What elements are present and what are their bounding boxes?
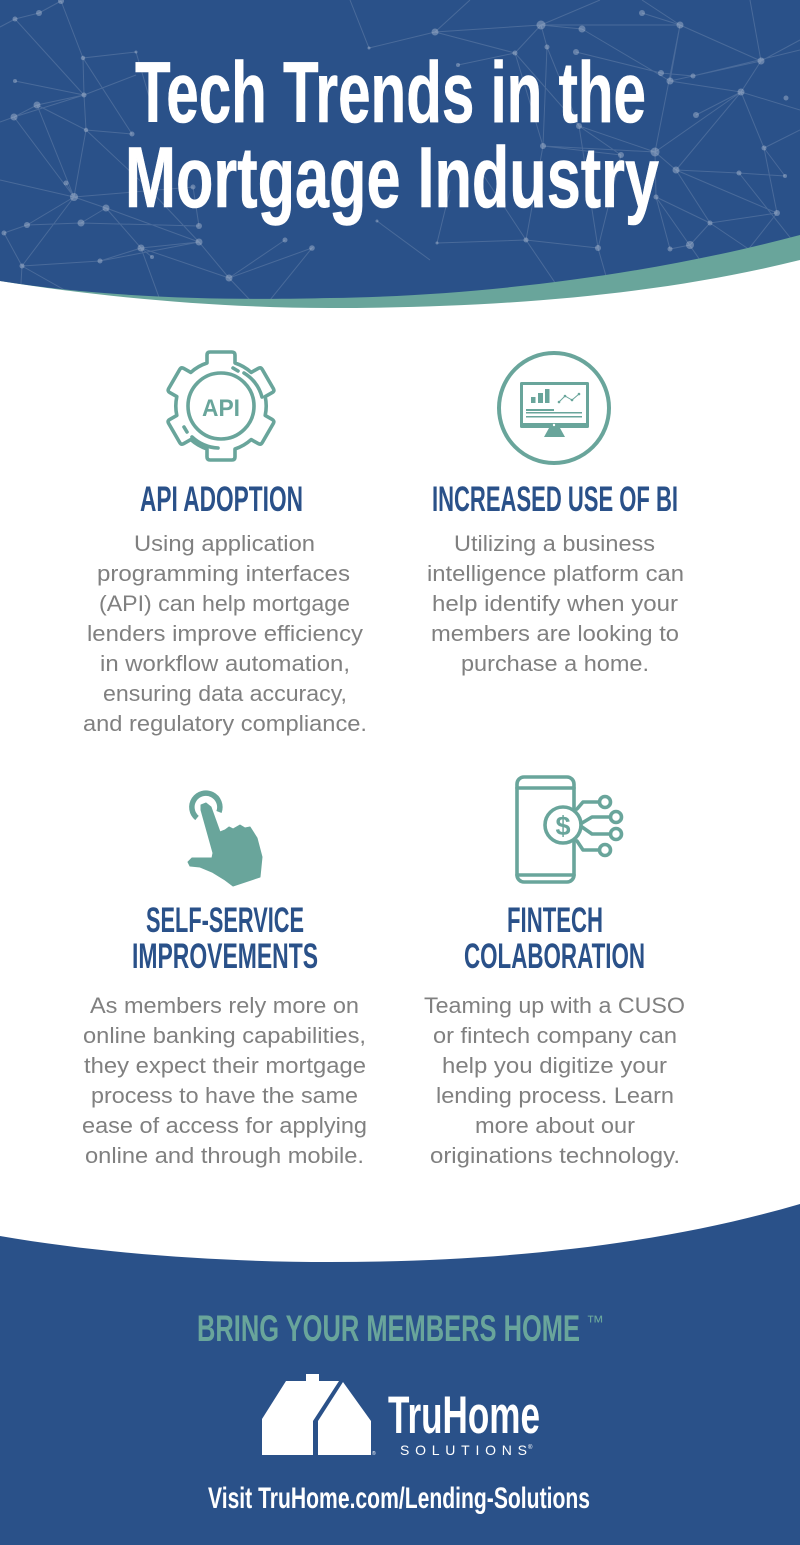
text block: process to have the same: [91, 1083, 358, 1108]
text block: [424, 993, 685, 1168]
text block: help you digitize your: [442, 1053, 667, 1078]
text block: lending process. Learn: [436, 1083, 674, 1108]
text block: [83, 531, 367, 736]
heading: SELF-SERVICE: [146, 901, 304, 940]
text block: or fintech company can: [433, 1023, 677, 1048]
tagline: ™: [586, 1312, 604, 1332]
heading: [132, 901, 318, 976]
panel: fintech collaboration: [424, 777, 685, 1168]
text block: [427, 531, 684, 676]
logo: TruHome Solutions: ®: [528, 1444, 533, 1451]
logo: TruHome Solutions: TruHome: [388, 1386, 540, 1445]
text block: online and through mobile.: [85, 1143, 364, 1168]
text block: Utilizing a business: [454, 531, 655, 556]
text block: intelligence platform can: [427, 561, 684, 586]
title: [125, 45, 659, 226]
panel: API adoption: [83, 352, 367, 736]
icon: monitor dashboard: [499, 353, 609, 463]
text block: and regulatory compliance.: [83, 711, 367, 736]
footer panel: [0, 1204, 800, 1545]
panel: increased use of BI: [427, 353, 684, 676]
text block: (API) can help mortgage: [99, 591, 350, 616]
text block: As members rely more on: [90, 993, 359, 1018]
text block: online banking capabilities,: [83, 1023, 366, 1048]
icon: phone with dollar circuit: $: [555, 811, 571, 841]
header banner: [0, 0, 800, 310]
text block: originations technology.: [430, 1143, 680, 1168]
heading: IMPROVEMENTS: [132, 937, 318, 976]
heading: FINTECH: [507, 901, 603, 940]
text block: ensuring data accuracy,: [103, 681, 347, 706]
panel: self-service improvements: [82, 793, 367, 1168]
text block: Teaming up with a CUSO: [424, 993, 685, 1018]
network pattern: [0, 0, 800, 310]
logo: TruHome Solutions: ®: [372, 1450, 376, 1457]
logo: TruHome Solutions: SOLUTIONS: [400, 1442, 527, 1458]
text block: ease of access for applying: [82, 1113, 367, 1138]
website link: Visit TruHome.com/Lending-Solutions: [208, 1482, 590, 1515]
tagline: BRING YOUR MEMBERS HOME: [197, 1308, 580, 1349]
icon: phone with dollar circuit: [517, 777, 622, 882]
text block: they expect their mortgage: [84, 1053, 366, 1078]
icon: API gear: API: [202, 395, 240, 422]
text block: Using application: [134, 531, 315, 556]
logo: TruHome Solutions: [262, 1374, 540, 1458]
text block: in workflow automation,: [100, 651, 350, 676]
heading: [464, 901, 645, 976]
text block: members are looking to: [431, 621, 679, 646]
text block: purchase a home.: [461, 651, 649, 676]
icon: tapping hand: [188, 793, 262, 886]
text block: lenders improve efficiency: [87, 621, 363, 646]
heading: API ADOPTION: [140, 480, 303, 519]
heading: COLABORATION: [464, 937, 645, 976]
text block: [82, 993, 367, 1168]
text block: programming interfaces: [97, 561, 350, 586]
text block: help identify when your: [432, 591, 678, 616]
icon: API gear: [168, 352, 274, 460]
text block: more about our: [475, 1113, 635, 1138]
